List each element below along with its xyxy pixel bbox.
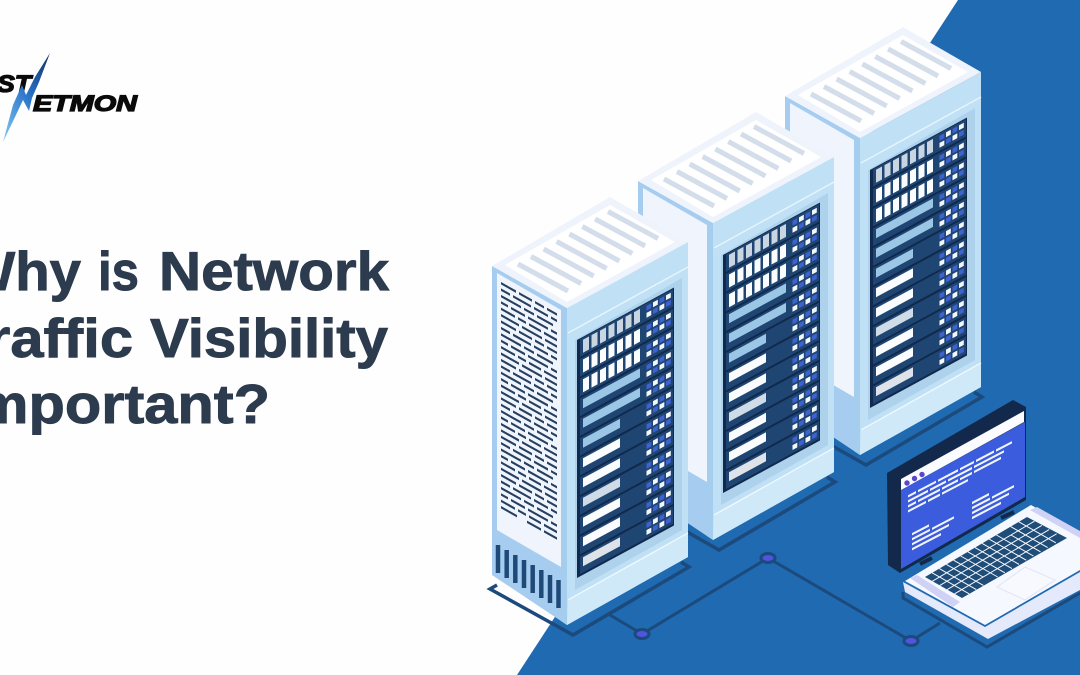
laptop base top (905, 505, 1080, 625)
node: right (904, 636, 918, 646)
node: left (635, 630, 649, 638)
logo: FastNetMon (0, 53, 138, 142)
window dots (904, 472, 925, 486)
node: centre (761, 554, 775, 562)
title: is (98, 240, 139, 302)
network connection lines and nodes (610, 554, 940, 646)
hinges (920, 512, 1014, 564)
base tray: server 1 (490, 562, 689, 635)
server rack 3 (785, 27, 981, 455)
laptop screen housing (887, 400, 1026, 573)
server 1 side panel text lines (501, 283, 557, 539)
laptop base side (903, 572, 1080, 639)
title (0, 240, 389, 435)
keyboard (925, 517, 1067, 598)
lavender strips (910, 507, 1080, 607)
laptop tray outline (903, 592, 1080, 647)
base tray: server 3 (783, 392, 982, 465)
title: Visibility (150, 307, 388, 369)
laptop (887, 400, 1080, 647)
touchpad (997, 567, 1055, 600)
screen text lines (908, 441, 1015, 551)
laptop title bar (901, 411, 1024, 490)
server rack 2 (638, 112, 834, 540)
base tray: server 2 (636, 477, 835, 550)
blue diagonal floor panel (517, 0, 1080, 675)
server 1 base vents (498, 545, 558, 608)
server rack 1 (492, 197, 688, 625)
laptop screen (901, 422, 1025, 569)
title: Network (159, 240, 389, 302)
logo: FastNetMon: ETMON (33, 91, 138, 116)
